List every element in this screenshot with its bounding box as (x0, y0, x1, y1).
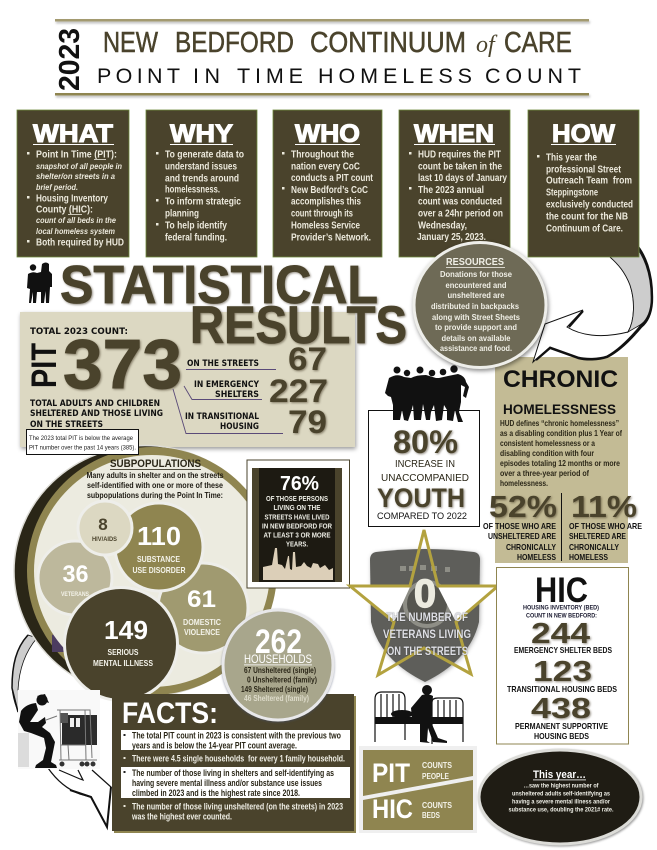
circle: substance use disorder: 110 (137, 521, 181, 551)
panel: total count: ON THE STREETS (30, 420, 103, 430)
panel: total count: PIT (25, 343, 64, 388)
panel: why: and trends around (165, 172, 239, 184)
callout: resources: unsheltered are (448, 290, 505, 300)
panel: total count: IN EMERGENCY (194, 380, 260, 390)
icon: person sitting on bed (375, 685, 463, 744)
callout: resources: to provide support and (435, 322, 517, 332)
chart: subpopulations circle: self-identified with one or more of these (87, 480, 223, 490)
title block: IN (193, 64, 220, 88)
panel: total count: 373 (63, 325, 182, 403)
icon: veteran shield and star: VETERANS LIVING (383, 629, 471, 641)
icon: veteran shield and star: 0 (414, 572, 436, 616)
panel: who: New Bedford’s CoC (291, 184, 368, 196)
panel: when: The 2023 annual (418, 184, 484, 196)
panel: 76 percent: YEARS. (286, 540, 308, 548)
panel: how: Continuum of Care. (546, 222, 623, 234)
panel: how: HOW (552, 120, 615, 148)
circle: serious mental illness: SERIOUS (108, 647, 139, 657)
chart: subpopulations circle (14, 446, 277, 700)
panel: hic bed counts (496, 568, 628, 744)
chronic homelessness panel: OF THOSE WHO ARE (569, 521, 642, 531)
panel: how: Steppingstone (546, 186, 598, 198)
panel: hic bed counts: TRANSITIONAL HOUSING BEDS (507, 684, 617, 694)
panel: 76 percent: OF THOSE PERSONS (266, 494, 328, 503)
panel: what: WHAT (33, 120, 113, 148)
callout: resources: RESOURCES (446, 257, 504, 268)
circle: serious mental illness (64, 588, 178, 700)
title block: HOMELESS (318, 64, 472, 88)
panel: what: brief period. (36, 182, 78, 192)
panel: facts: years and is below the 14-year PIT count average. (132, 740, 297, 752)
note: below average: The 2023 total PIT is below the average (29, 435, 133, 442)
panel: facts: FACTS: (122, 697, 218, 730)
panel: how: professional Street (546, 164, 621, 176)
circle: households (223, 610, 333, 720)
panel: why: To help identify (165, 220, 227, 232)
panel: who: Provider’s Network. (291, 232, 371, 244)
panel: why: homelessness. (165, 184, 220, 196)
circle: households: 67 Unsheltered (single) (244, 666, 316, 675)
callout: this year: …saw the highest number of (524, 782, 599, 790)
circle: serious mental illness: 149 (104, 615, 148, 645)
icon: veteran shield and star (350, 530, 498, 682)
panel: who: Throughout the (291, 148, 354, 160)
panel: total count: IN TRANSITIONAL (185, 412, 260, 422)
callout: this year: This year… (533, 769, 586, 781)
panel: hic bed counts: HIC (535, 571, 588, 610)
circle: veterans: 36 (62, 561, 88, 588)
panel: 80 percent youth: COMPARED TO 2022 (377, 511, 467, 522)
panel: what: Housing Inventory (36, 192, 108, 204)
panel: 76 percent (247, 460, 350, 588)
panel: why: To generate data to (165, 148, 244, 160)
chronic homelessness panel: homelessness. (500, 478, 548, 488)
icon: veteran shield and star: THE NUMBER OF (386, 612, 468, 624)
circle: domestic violence: VIOLENCE (184, 627, 220, 637)
panel: 80 percent youth: UNACCOMPANIED (381, 472, 469, 484)
panel: why (146, 110, 257, 257)
panel: what: snapshot of all people in (36, 161, 122, 171)
circle: hiv/aids (78, 501, 132, 555)
panel: when: count be taken in the (418, 160, 502, 172)
panel: when: WHEN (414, 120, 494, 148)
panel: when (399, 110, 510, 257)
chronic homelessness panel: disabling condition with four (500, 448, 595, 458)
panel: 80 percent youth: INCREASE IN (395, 458, 455, 470)
title block: TIME (237, 64, 303, 88)
panel: 76 percent: LIVING ON THE (274, 503, 320, 512)
circle: domestic violence: DOMESTIC (183, 617, 221, 627)
panel: how (528, 110, 639, 257)
panel: 76 percent: STREETS HAVE LIVED (264, 512, 330, 522)
chronic homelessness panel: HOMELESSNESS (503, 401, 616, 417)
heading: statistical results (60, 255, 407, 355)
panel: 76 percent: 76% (280, 473, 319, 495)
callout: resources: distributed in backpacks (431, 301, 519, 311)
chronic homelessness panel: over a three-year period of (500, 468, 589, 478)
chronic homelessness panel: CHRONIC (503, 366, 618, 393)
title block: BEDFORD (175, 27, 294, 59)
panel: total count: 67 (288, 341, 327, 377)
title block: CONTINUUM (310, 27, 466, 59)
panel: total count: TOTAL ADULTS AND CHILDREN (30, 399, 160, 409)
panel: pit counts people, hic counts beds: COUNTS (422, 801, 453, 810)
panel: who: nation every CoC (291, 160, 360, 172)
circle: households: 149 Sheltered (single) (241, 685, 308, 694)
panel: why: understand issues (165, 160, 237, 172)
panel: 76 percent: AT LEAST 3 OR MORE (264, 530, 330, 540)
panel: why: federal funding. (165, 232, 227, 244)
panel: what: local homeless system (36, 226, 115, 236)
panel: 80 percent youth (368, 365, 480, 526)
panel: hic bed counts: HOUSING BEDS (534, 731, 589, 741)
title block (54, 19, 589, 96)
title block: NEW (103, 27, 158, 59)
panel: pit counts people, hic counts beds: HIC (372, 794, 413, 824)
circle: households: HOUSEHOLDS (244, 652, 312, 666)
panel: hic bed counts: HOUSING INVENTORY (BED) (523, 604, 599, 612)
panel: how: Outreach Team from (546, 174, 632, 186)
panel: pit counts people, hic counts beds: PIT (372, 758, 410, 788)
panel: 80 percent youth: 80% (393, 424, 458, 460)
chronic homelessness panel: CHRONICALLY (569, 542, 619, 552)
chronic homelessness panel: episodes totaling 12 months or more (500, 458, 620, 468)
chart: subpopulations circle: Many adults in shelter and on the streets (86, 470, 224, 480)
panel: who: WHO (295, 120, 360, 148)
chronic homelessness panel: OF THOSE WHO ARE (483, 521, 556, 531)
panel: pit counts people, hic counts beds: COUNTS (422, 761, 453, 770)
callout: resources: along with Street Sheets (432, 312, 520, 322)
chronic homelessness panel: UNSHELTERED ARE (488, 531, 556, 541)
circle: households: 0 Unsheltered (family) (247, 676, 317, 684)
chronic homelessness panel: 52% (489, 489, 557, 524)
circle: substance use disorder: USE DISORDER (132, 565, 186, 575)
panel: hic bed counts: 244 (531, 618, 590, 650)
panel: who: conducts a PIT count (291, 172, 373, 184)
panel: 80 percent youth: YOUTH (377, 483, 465, 513)
circle: serious mental illness: MENTAL ILLNESS (93, 658, 153, 668)
panel: who: accomplishes this (291, 196, 361, 208)
callout: this year: substance use, doubling the 2021# rate. (508, 806, 614, 814)
title block: of (476, 32, 498, 58)
callout: resources: encountered and (446, 280, 506, 290)
panel: hic bed counts: 438 (531, 693, 591, 725)
chronic homelessness panel: SHELTERED ARE (569, 531, 626, 541)
panel: facts (112, 694, 356, 833)
icon: arrow to cart (12, 635, 111, 827)
panel: what: Both required by HUD (36, 236, 124, 248)
panel: why: To inform strategic (165, 196, 241, 208)
panel: when: count was conducted (418, 196, 502, 208)
chronic homelessness panel: consistent homelessness or a (500, 438, 595, 448)
chronic homelessness panel: HOMELESS (569, 552, 608, 562)
panel: pit counts people, hic counts beds: PEOPLE (422, 772, 450, 781)
circle: households: 262 (255, 623, 302, 661)
icon: man with shopping cart (18, 690, 100, 769)
panel: total count: HOUSING (220, 422, 259, 432)
panel: total count: SHELTERED AND THOSE LIVING (30, 409, 163, 419)
chronic homelessness panel: 11% (571, 489, 637, 524)
chronic homelessness panel: HUD defines “chronic homelessness” (500, 418, 619, 428)
panel: total count: 227 (269, 373, 328, 409)
circle: households: 46 Sheltered (family) (244, 694, 309, 703)
heading: statistical results: RESULTS (190, 296, 407, 355)
callout: this year: having a severe mental illness and/or (512, 798, 610, 806)
panel: total count: 79 (288, 404, 327, 440)
panel: hic bed counts: EMERGENCY SHELTER BEDS (514, 645, 612, 655)
panel: facts: having severe mental illness and/or substance use issues (132, 778, 322, 789)
panel: when: Wednesday, (418, 220, 467, 232)
panel: facts: climbed in 2023 and is the highest rate since 2018. (132, 788, 300, 799)
title block: 2023 (54, 28, 86, 91)
circle: veterans: VETERANS (61, 591, 90, 598)
panel: when: over a 24hr period on (418, 208, 503, 220)
panel: facts: The number of those living unsheltered (on the streets) in 2023 (132, 802, 343, 812)
panel: 76 percent: IN NEW BEDFORD FOR (262, 522, 332, 530)
circle: veterans (38, 541, 112, 615)
callout: resources: Donations for those (440, 269, 512, 279)
panel: when: HUD requires the PIT (418, 148, 501, 160)
panel: pit counts people, hic counts beds: BEDS (422, 811, 441, 820)
panel: facts: was the highest ever counted. (131, 812, 232, 822)
callout: resources (414, 242, 546, 368)
title block: COUNT (485, 64, 581, 88)
panel: what: Point In Time (PIT): (36, 148, 117, 160)
callout: resources: assistance and food. (440, 343, 512, 353)
panel: why: planning (165, 208, 199, 220)
title block: POINT (97, 64, 180, 88)
panel: who: count through its (291, 208, 353, 220)
circle: domestic violence (158, 563, 248, 653)
icon: veteran shield and star: ON THE STREETS (387, 646, 468, 658)
icon: city skyline (263, 548, 333, 580)
panel: how: exclusively conducted (546, 198, 633, 210)
chronic homelessness panel (483, 357, 642, 563)
icon: couple silhouette (27, 262, 52, 303)
panel: when: January 25, 2023. (417, 231, 486, 243)
panel: total count: TOTAL 2023 COUNT: (30, 327, 128, 337)
panel: how: This year the (546, 152, 597, 164)
circle: substance use disorder: SUBSTANCE (137, 554, 180, 564)
panel: facts: The number of those living in shelters and self-identifying as (132, 768, 334, 779)
note: below average: PIT number over the past 14 years (385). (29, 444, 136, 452)
callout: this year: unsheltered adults self-identifying as (512, 790, 610, 798)
panel: total count (20, 312, 355, 447)
chronic homelessness panel: as a disabling condition plus 1 Year of (500, 428, 622, 438)
title block: CARE (504, 27, 572, 59)
circle: substance use disorder (115, 503, 203, 591)
panel: when: last 10 days of January (418, 172, 507, 184)
arrow: how to resources (533, 238, 652, 362)
panel: facts: There were 4.5 single households for every 1 family household. (132, 754, 345, 764)
note: below average (26, 430, 138, 454)
panel: facts: The total PIT count in 2023 is consistent with the previous two (132, 730, 341, 742)
panel: who: Homeless Service (291, 220, 360, 232)
panel: who (273, 110, 382, 257)
callout: this year (479, 750, 641, 844)
panel: how: the count for the NB (546, 210, 628, 222)
panel: what: shelter/on streets in a (36, 171, 115, 181)
panel: why: WHY (170, 120, 233, 148)
icon: group silhouette (385, 365, 469, 422)
panel: pit counts people, hic counts beds (359, 746, 477, 833)
panel: hic bed counts: COUNT IN NEW BEDFORD: (526, 612, 597, 620)
circle: hiv/aids: HIV/AIDS (92, 537, 117, 543)
panel: what (17, 110, 129, 257)
panel: hic bed counts: PERMANENT SUPPORTIVE (515, 721, 608, 731)
chronic homelessness panel: CHRONICALLY (506, 542, 556, 552)
panel: total count: ON THE STREETS (187, 359, 259, 369)
panel: hic bed counts: 123 (533, 656, 592, 688)
chart: subpopulations circle: subpopulations during the Point In Time: (87, 490, 223, 500)
chronic homelessness panel: HOMELESS (517, 552, 556, 562)
chart: subpopulations circle: SUBPOPULATIONS (110, 458, 201, 470)
panel: total count: SHELTERS (215, 390, 259, 400)
circle: domestic violence: 61 (187, 586, 216, 613)
callout: resources: details on available (442, 333, 511, 343)
circle: hiv/aids: 8 (98, 515, 108, 534)
panel: what: County (HIC): (36, 204, 93, 216)
panel: what: count of all beds in the (36, 215, 116, 225)
heading: statistical results: STATISTICAL (60, 255, 378, 315)
